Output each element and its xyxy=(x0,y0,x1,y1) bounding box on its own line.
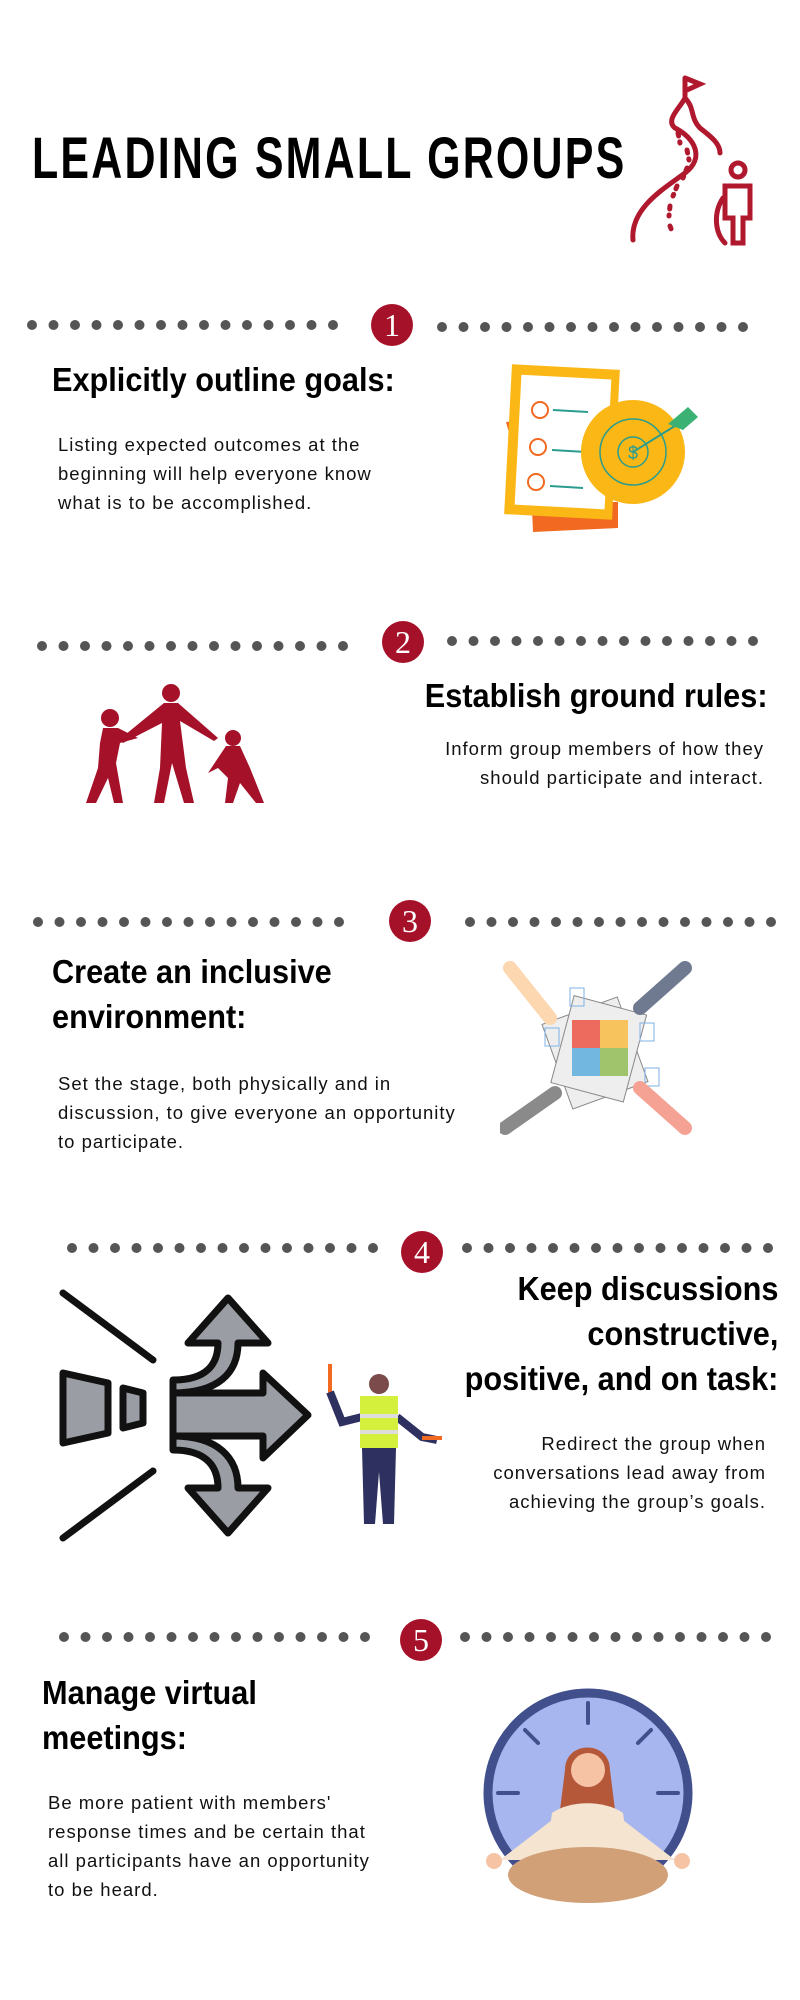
heading 3: environment: xyxy=(52,998,246,1035)
illustration: adult with children xyxy=(86,684,264,803)
text 2 xyxy=(445,738,764,788)
number badge 4: 4 xyxy=(414,1234,430,1270)
divider 3 xyxy=(33,900,776,942)
number badge 5 xyxy=(400,1619,442,1661)
text 1: Listing expected outcomes at the xyxy=(58,434,360,455)
text 1: beginning will help everyone know xyxy=(58,463,372,484)
text 3: Set the stage, both physically and in xyxy=(58,1073,391,1094)
heading 4: constructive, xyxy=(587,1315,778,1352)
number badge 2: 2 xyxy=(395,624,411,660)
illustration: diverging arrows xyxy=(60,1290,312,1542)
illustration: checklist and target: $ xyxy=(628,443,638,463)
text 5: response times and be certain that xyxy=(48,1821,366,1842)
title: LEADING SMALL GROUPS xyxy=(32,126,626,191)
text 1 xyxy=(58,434,372,513)
illustration: hands and puzzle xyxy=(500,961,692,1135)
number badge 5: 5 xyxy=(413,1622,429,1658)
heading 3: Create an inclusive xyxy=(52,953,332,990)
text 4 xyxy=(493,1433,766,1512)
illustration: traffic marshal xyxy=(326,1364,442,1524)
heading 5 xyxy=(42,1674,257,1756)
number badge 1 xyxy=(371,304,413,346)
number badge 2 xyxy=(382,621,424,663)
heading 2: Establish ground rules: xyxy=(425,677,768,714)
divider 1 xyxy=(27,304,748,346)
text 4: Redirect the group when xyxy=(541,1433,766,1454)
number badge 4 xyxy=(401,1231,443,1273)
text 4: achieving the group’s goals. xyxy=(509,1491,766,1512)
heading 4 xyxy=(464,1270,778,1397)
text 2: should participate and interact. xyxy=(480,767,764,788)
icon: winding road with flag and person xyxy=(630,76,752,246)
divider 5 xyxy=(59,1619,771,1661)
number badge 1: 1 xyxy=(384,307,400,343)
heading 5: meetings: xyxy=(42,1719,187,1756)
number badge 3 xyxy=(389,900,431,942)
text 3: discussion, to give everyone an opportunity xyxy=(58,1102,456,1123)
heading 4: positive, and on task: xyxy=(464,1360,778,1397)
number badge 3: 3 xyxy=(402,903,418,939)
divider 2 xyxy=(37,621,758,663)
text 1: what is to be accomplished. xyxy=(58,492,312,513)
text 5: to be heard. xyxy=(48,1879,159,1900)
illustration: meditating woman on clock xyxy=(484,1688,692,1903)
heading 4: Keep discussions xyxy=(517,1270,778,1307)
text 3 xyxy=(58,1073,456,1152)
divider 4 xyxy=(67,1231,773,1273)
text 5: all participants have an opportunity xyxy=(48,1850,370,1871)
heading 5: Manage virtual xyxy=(42,1674,257,1711)
text 5 xyxy=(48,1792,370,1900)
illustration: checklist and target xyxy=(504,364,698,532)
text 4: conversations lead away from xyxy=(493,1462,766,1483)
text 2: Inform group members of how they xyxy=(445,738,764,759)
text 3: to participate. xyxy=(58,1131,184,1152)
heading 3 xyxy=(52,953,332,1035)
heading 1: Explicitly outline goals: xyxy=(52,361,395,398)
text 5: Be more patient with members' xyxy=(48,1792,331,1813)
